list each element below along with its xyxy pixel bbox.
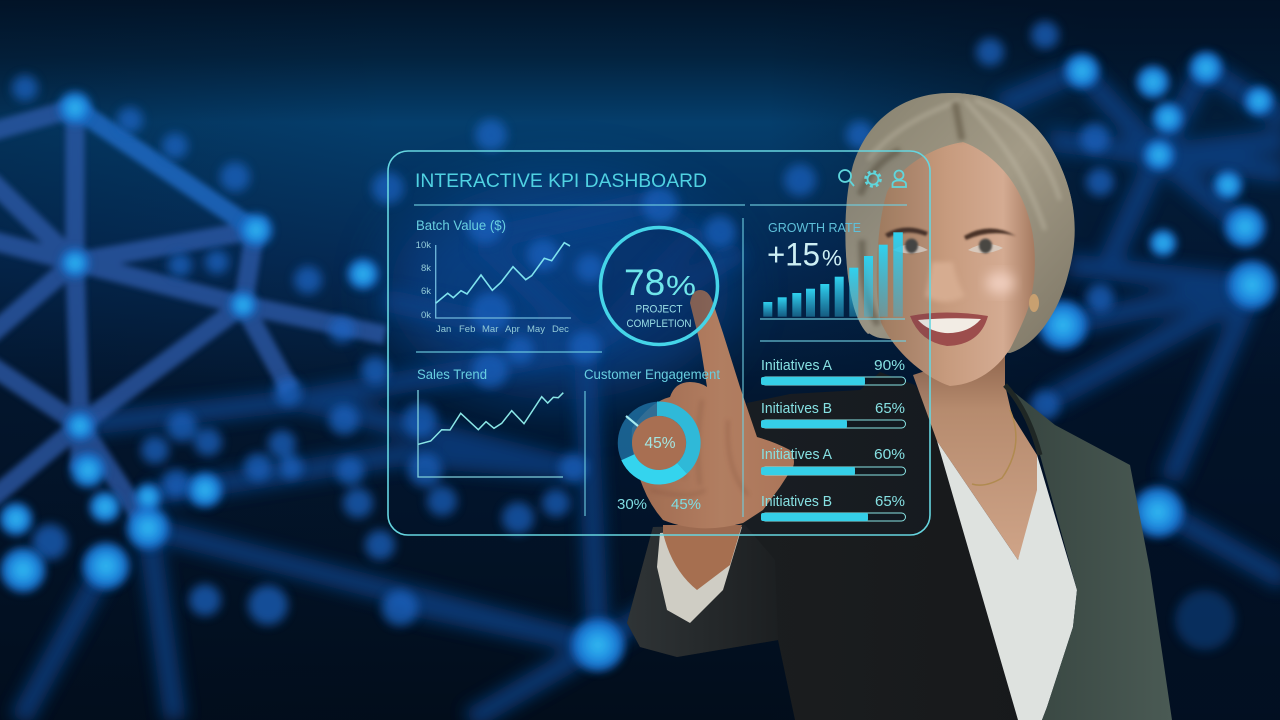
chart: batch value: Batch Value ($) bbox=[416, 218, 506, 233]
gauge: project completion: COMPLETION bbox=[626, 318, 692, 330]
chart: customer engagement donut: Customer Engagement bbox=[584, 367, 720, 382]
hand: cuff and wrist bbox=[657, 525, 742, 623]
progress row 4: 65% bbox=[875, 493, 905, 510]
gauge: project completion: PROJECT bbox=[636, 304, 683, 316]
progress row 4 bbox=[761, 493, 906, 521]
icon: gear bbox=[866, 172, 880, 186]
woman: face bbox=[877, 142, 1035, 386]
icon: search bbox=[839, 170, 854, 186]
background: left network lines bbox=[0, 108, 385, 528]
woman: irises bbox=[905, 239, 992, 253]
header icons bbox=[839, 170, 906, 187]
woman: earring bbox=[1029, 294, 1039, 312]
chart: customer engagement donut: 45% bbox=[644, 435, 676, 452]
woman: hair back bbox=[845, 93, 1074, 353]
gauge: project completion: 78 bbox=[624, 262, 665, 303]
woman: lips bbox=[910, 312, 988, 346]
woman: cheek highlight bbox=[986, 272, 1014, 294]
progress row 1: 90% bbox=[874, 357, 905, 374]
icon: user bbox=[892, 170, 906, 187]
progress row 2: Initiatives B bbox=[761, 400, 832, 417]
gauge: project completion: % bbox=[666, 270, 696, 301]
chart: sales trend: Sales Trend bbox=[417, 367, 487, 382]
chart: customer engagement donut: 45% bbox=[671, 496, 701, 513]
dashboard panel bbox=[388, 151, 930, 535]
woman: eyebrows bbox=[885, 227, 1016, 240]
gauge: project completion bbox=[600, 228, 718, 344]
chart: growth rate bars: GROWTH RATE bbox=[768, 221, 861, 235]
chart: growth rate bars bbox=[763, 221, 903, 317]
chart: batch value: 8k bbox=[421, 263, 431, 274]
woman: green blazer lapel and body bbox=[1005, 385, 1172, 720]
chart: batch value: Dec bbox=[552, 324, 569, 335]
progress row 2 bbox=[761, 400, 906, 428]
progress row 1: Initiatives A bbox=[761, 357, 832, 374]
chart: batch value: Jan bbox=[436, 324, 451, 335]
progress list: initiatives bbox=[761, 357, 906, 521]
woman: hair front bbox=[845, 93, 1075, 353]
chart: batch value: Mar bbox=[482, 324, 498, 335]
dividers bbox=[414, 205, 907, 517]
chart: batch value: 0k bbox=[421, 310, 431, 321]
woman: neck and chest bbox=[913, 345, 1037, 560]
chart: customer engagement donut: 30% bbox=[617, 496, 647, 513]
progress row 3: Initiatives A bbox=[761, 446, 832, 463]
woman: eye whites bbox=[893, 244, 1003, 254]
chart: growth rate bars: % bbox=[822, 246, 842, 270]
woman: blouse bbox=[937, 441, 1077, 720]
chart: growth rate bars: +15 bbox=[767, 236, 820, 272]
woman: nose bbox=[925, 262, 965, 302]
chart: sales trend bbox=[417, 367, 563, 477]
chart: batch value: Apr bbox=[505, 324, 520, 335]
chart: batch value: Feb bbox=[459, 324, 475, 335]
progress row 3: 60% bbox=[874, 446, 905, 463]
progress row 2: 65% bbox=[875, 400, 905, 417]
title: INTERACTIVE KPI DASHBOARD bbox=[415, 170, 707, 192]
chart: batch value: 6k bbox=[421, 286, 431, 297]
progress row 1 bbox=[761, 357, 906, 385]
chart: customer engagement donut bbox=[584, 367, 720, 513]
progress row 3 bbox=[761, 446, 906, 475]
woman: dark blazer body and sleeve bbox=[627, 372, 1030, 720]
chart: batch value bbox=[416, 218, 571, 335]
woman: teeth bbox=[918, 318, 981, 333]
hand: pointing finger and palm bbox=[632, 290, 794, 528]
chart: batch value: May bbox=[527, 324, 545, 335]
chart: batch value: 10k bbox=[416, 240, 431, 251]
progress row 4: Initiatives B bbox=[761, 493, 832, 510]
